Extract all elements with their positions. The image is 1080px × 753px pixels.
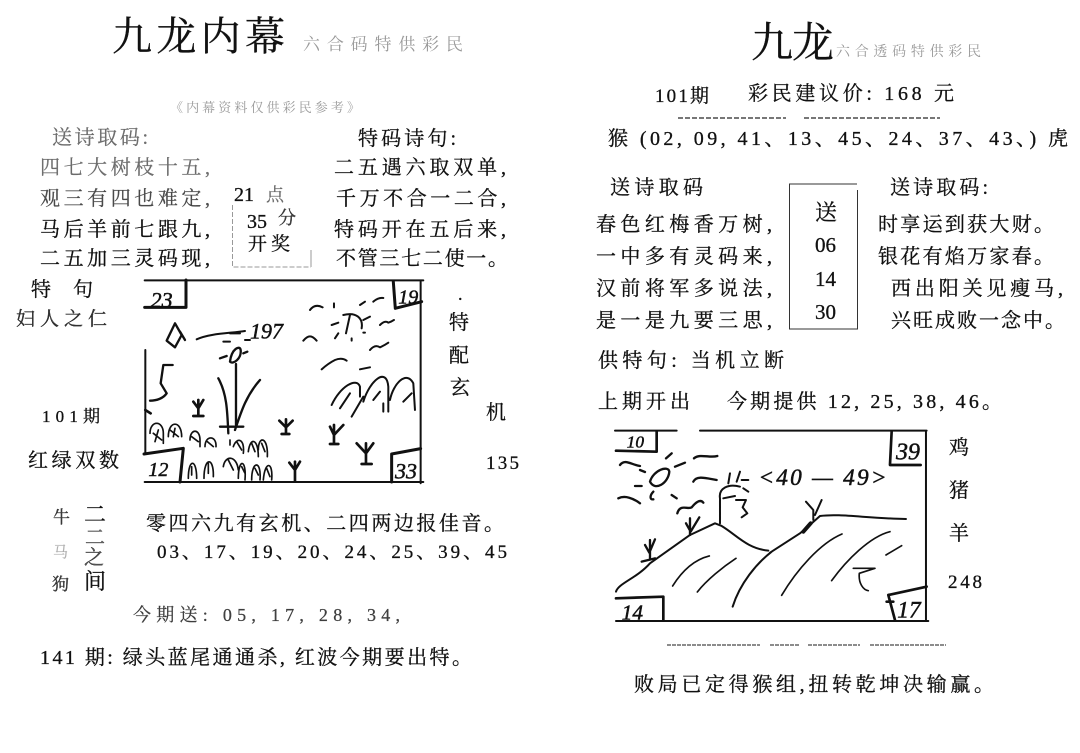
right sketch illustration <box>615 431 928 624</box>
left sketch illustration <box>144 280 423 483</box>
left faint subtitle: 六合码特供彩民 <box>303 35 463 54</box>
issue 141 line: 141 期: 绿头蓝尾通通杀, 红波今期要出特。 <box>40 646 472 669</box>
zodiac numbers row: 猴 (02, 09, 41、13、45、24、37、43、) 虎 <box>608 127 1068 150</box>
gift numbers box: 06 <box>815 233 836 257</box>
left sketch illustration: 197 <box>250 318 284 343</box>
left poem lines: 观三有四也难定, <box>40 187 210 210</box>
left poem heading: 送诗取码 <box>610 176 703 199</box>
right side vertical label: . <box>458 284 462 304</box>
right side vertical label: 玄 <box>450 376 470 399</box>
draw time box: 开奖 <box>248 233 290 255</box>
left poem lines: 二五加三灵码现, <box>40 247 210 270</box>
left poem heading: 送诗取码: <box>52 126 148 149</box>
gift numbers box: 送 <box>815 200 837 225</box>
left poem <box>596 213 772 332</box>
right sketch illustration: 10 <box>627 432 644 451</box>
zodiac column: 猪 <box>949 479 969 502</box>
left sketch illustration: 23 <box>151 287 173 312</box>
faint clipped line <box>667 644 946 646</box>
draw time box: 点 <box>266 185 285 205</box>
right side vertical label: 配 <box>449 344 469 367</box>
right side vertical label: 特 <box>449 311 469 334</box>
red green even: 红绿双数 <box>28 449 119 472</box>
right sketch illustration: 17 <box>897 597 922 623</box>
left poem lines <box>40 156 210 270</box>
zodiac column: 羊 <box>949 522 969 545</box>
right sketch illustration: 14 <box>622 600 643 624</box>
vertical phrase: 之 <box>84 546 104 569</box>
left sketch illustration: 19 <box>398 286 418 308</box>
issue and price: 101期 <box>655 85 709 107</box>
right poem lines <box>334 156 508 270</box>
right poem: 西出阳关见瘦马, <box>891 277 1063 300</box>
left title: 九龙内幕 <box>112 14 285 59</box>
right poem lines: 特码开在五后来, <box>334 218 506 241</box>
issue 101: 101期 <box>42 407 100 426</box>
right side vertical label: 机 <box>486 401 506 424</box>
vertical phrase: 间 <box>84 569 106 594</box>
side zodiac labels <box>52 508 70 594</box>
special phrase label: 特 句 <box>31 278 93 301</box>
right poem lines: 二五遇六取双单, <box>334 156 506 179</box>
side zodiac labels: 牛 <box>53 508 70 527</box>
right poem <box>878 213 1065 332</box>
left poem lines: 马后羊前七跟九, <box>40 218 210 241</box>
zodiac column: 248 <box>948 572 982 593</box>
number list: 03、17、19、20、24、25、39、45 <box>157 542 507 563</box>
right poem: 时享运到获大财。 <box>878 213 1054 236</box>
right title: 九龙 <box>751 21 834 67</box>
draw time box <box>232 184 311 267</box>
vertical phrase: 二 <box>85 527 105 549</box>
issue and price: 彩民建议价: 168 元 <box>748 82 954 105</box>
side zodiac labels: 马 <box>53 544 68 561</box>
left poem: 是一是九要三思, <box>596 309 772 332</box>
gift numbers box <box>790 184 858 329</box>
this issue numbers: 今期送: 05, 17, 28, 34, <box>133 605 400 625</box>
left sketch illustration: 12 <box>148 459 168 481</box>
left sketch illustration: 33 <box>394 458 417 483</box>
last issue and this issue <box>598 390 1002 413</box>
special phrase: 供特句: 当机立断 <box>598 349 784 372</box>
left poem lines: 四七大树枝十五, <box>40 156 210 179</box>
left poem: 汉前将军多说法, <box>596 277 772 300</box>
right poem heading: 送诗取码: <box>890 176 988 199</box>
right sketch illustration: 39 <box>895 439 920 465</box>
right side vertical label <box>449 284 519 474</box>
right poem: 兴旺成败一念中。 <box>891 309 1065 332</box>
last issue and this issue: 上期开出 <box>598 390 690 413</box>
right faint subtitle: 六合透码特供彩民 <box>836 43 981 60</box>
right side vertical label: 135 <box>486 453 519 474</box>
right panel: 九龙 sheet <box>596 21 1068 696</box>
draw time box: 35 <box>247 211 267 233</box>
right poem lines: 千万不合一二合, <box>336 187 506 210</box>
special phrase: 妇人之仁 <box>16 308 107 330</box>
zodiac column: 鸡 <box>949 436 969 459</box>
right sketch illustration: <40 — 49> <box>758 465 887 491</box>
left poem: 一中多有灵码来, <box>596 245 772 268</box>
poem couplet: 零四六九有玄机、二四两边报佳音。 <box>146 512 504 535</box>
vertical phrase <box>84 502 106 594</box>
clipped faint line <box>678 117 940 119</box>
zodiac column <box>948 436 982 593</box>
draw time box: 21 <box>234 184 254 206</box>
closing line: 败局已定得猴组,扭转乾坤决输赢。 <box>634 673 994 696</box>
left poem: 春色红梅香万树, <box>596 213 772 236</box>
gift numbers box: 14 <box>815 267 836 291</box>
draw time box: 分 <box>278 208 296 228</box>
vertical phrase: 二 <box>84 502 106 527</box>
last issue and this issue: 今期提供 12, 25, 38, 46。 <box>727 390 1002 413</box>
right poem lines: 不管三七二使一。 <box>336 247 508 270</box>
side zodiac labels: 狗 <box>52 575 69 594</box>
gift numbers box: 30 <box>815 300 836 324</box>
issue and price <box>655 82 954 107</box>
left panel: 九龙内幕 sheet <box>16 14 519 669</box>
special code heading: 特码诗句: <box>358 127 456 150</box>
left faint note: 《内幕资料仅供彩民参考》 <box>170 100 360 115</box>
right poem: 银花有焰万家春。 <box>878 245 1054 268</box>
